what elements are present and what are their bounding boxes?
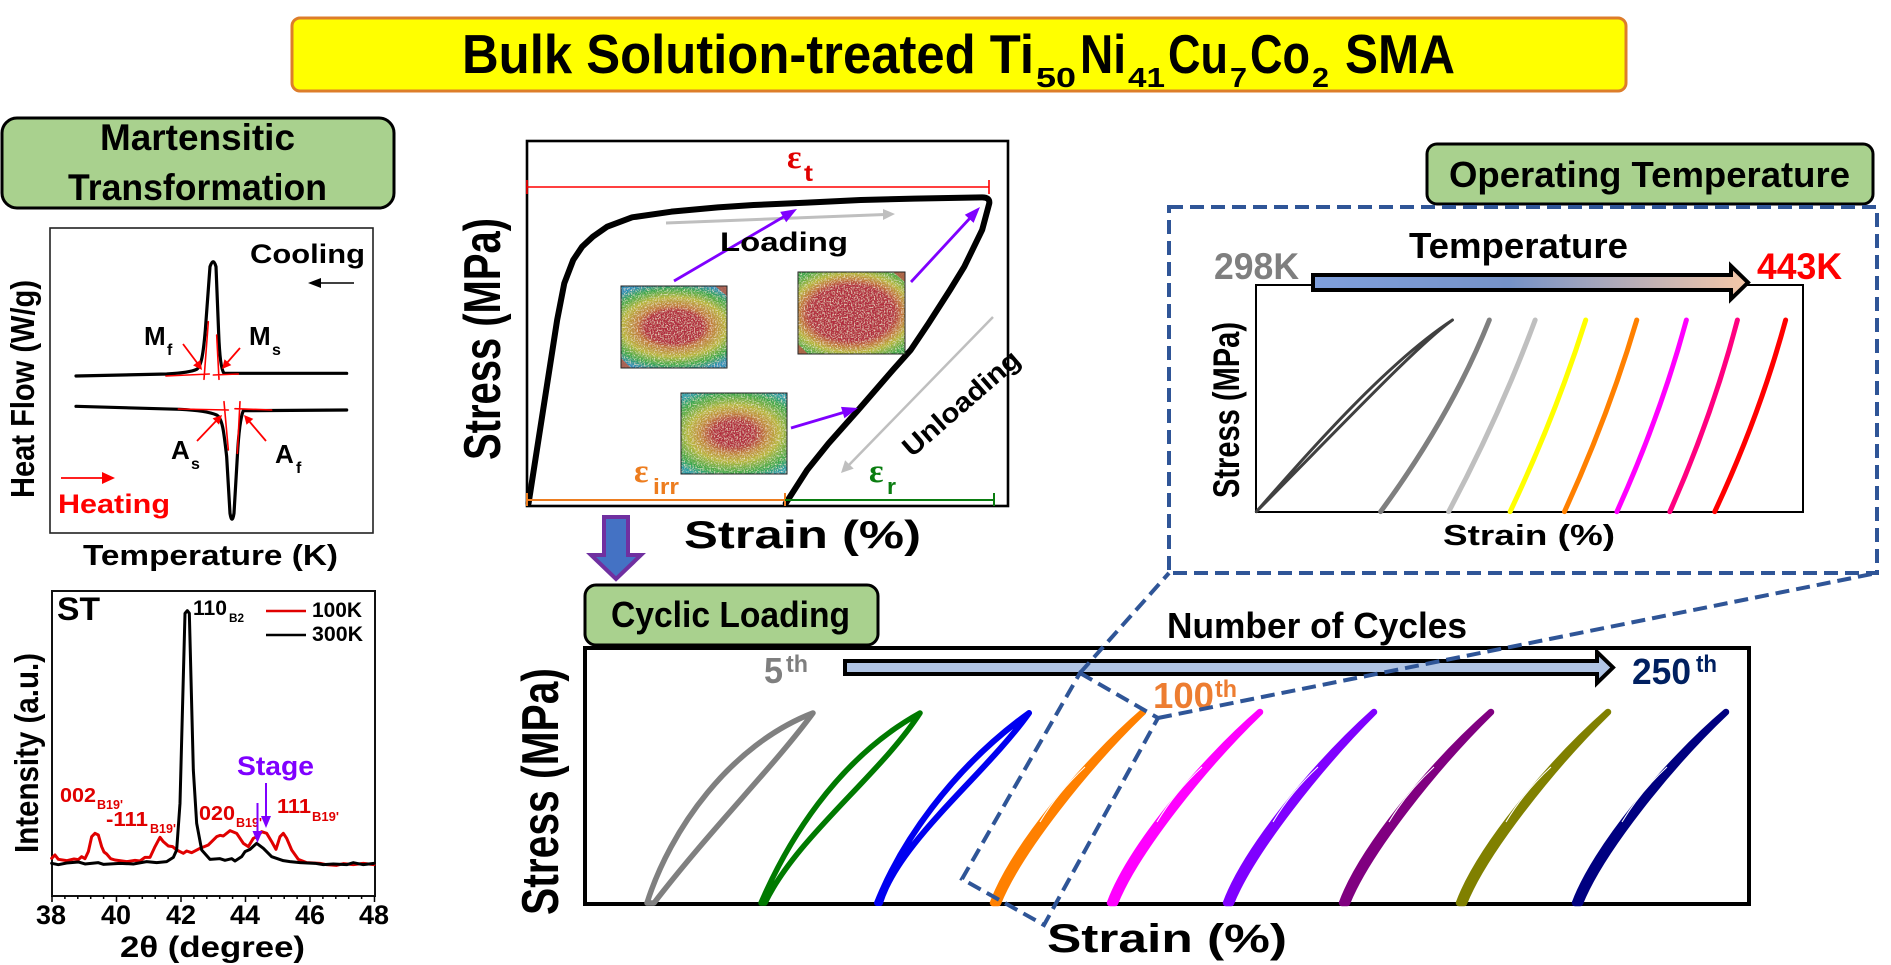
peak labels: B19'	[150, 821, 176, 836]
label: 5th: th	[786, 651, 808, 678]
curve: 100K trace	[52, 831, 374, 865]
peak labels: B19'	[97, 797, 123, 812]
title banner: Co	[1250, 23, 1310, 85]
x tick labels: XRD: 44	[230, 900, 260, 930]
dimension: total strain	[527, 180, 989, 194]
x tick labels: XRD: 42	[166, 900, 196, 930]
heading: Operating Temperature	[1427, 144, 1873, 204]
loop: purple	[1342, 712, 1491, 903]
peak labels: 111	[277, 796, 311, 818]
label: 100th: th	[1215, 676, 1237, 703]
chart: operating temperature curves	[1206, 225, 1842, 552]
heading: Cyclic Loading	[585, 585, 878, 645]
peak labels: -111	[106, 809, 148, 831]
legend: 100K	[312, 599, 362, 622]
label: 250th: 250	[1632, 651, 1691, 692]
loop: 250th cycle navy	[1575, 712, 1726, 903]
title banner: 41	[1128, 62, 1165, 93]
x tick labels: XRD: 40	[101, 900, 131, 930]
title banner: Bulk Solution-treated Ti	[462, 23, 1034, 85]
chart: cyclic loading curves	[585, 648, 1749, 904]
dimension: irreversible strain	[527, 493, 785, 506]
label: Ms	[249, 321, 281, 359]
chart: DSC heat flow	[50, 228, 373, 533]
label: epsilon r	[869, 453, 896, 499]
label: 250th: th	[1696, 651, 1717, 678]
axis label: main strain: Strain (%)	[684, 514, 921, 557]
arrow: heating direction	[61, 472, 115, 484]
arrow: pointer to image 1	[674, 209, 797, 281]
loop: 100th cycle orange	[993, 712, 1143, 903]
heading: Cyclic Loading: Cyclic Loading	[611, 594, 850, 635]
label: epsilon t: ε	[787, 139, 802, 176]
peak labels: 020	[199, 803, 235, 825]
curve: 300K trace	[52, 611, 374, 865]
label: Ms: M	[249, 321, 271, 351]
label: epsilon t	[787, 139, 813, 186]
dimension: recoverable strain	[785, 493, 994, 506]
x tick labels: XRD	[36, 900, 389, 930]
label: Temperature: Temperature	[1409, 225, 1628, 266]
label: Af	[275, 439, 302, 477]
label: epsilon r: r	[887, 474, 896, 499]
label: Mf	[144, 321, 173, 359]
axis label: Intensity: Intensity (a.u.)	[8, 653, 45, 853]
title banner: 50	[1036, 62, 1076, 93]
text: Unloading: Unloading	[896, 344, 1026, 463]
label: 298K: 298K	[1214, 246, 1299, 287]
x tick labels: XRD: 38	[36, 900, 66, 930]
curves by temperature	[1256, 320, 1786, 512]
label: 100th: 100	[1153, 675, 1214, 716]
arrow: cooling direction	[308, 278, 354, 288]
loop: violet	[1226, 712, 1374, 903]
legend	[266, 599, 363, 646]
label: 443K: 443K	[1757, 246, 1842, 287]
label: 110 B2	[193, 597, 244, 625]
arrow: Ms	[222, 348, 240, 369]
axis label: cyclic stress: Stress (MPa)	[512, 668, 570, 915]
text: Cooling label: Cooling	[250, 239, 365, 269]
axis label: 2 theta: 2θ (degree)	[120, 931, 305, 964]
loop: green	[761, 713, 920, 903]
arrow: Mf	[183, 344, 202, 370]
label: Number of Cycles: Number of Cycles	[1167, 605, 1467, 646]
axis label: Heat Flow (W/g): Heat Flow (W/g)	[4, 280, 41, 498]
title banner: 7	[1230, 62, 1247, 93]
loop: blue	[877, 713, 1029, 903]
arrow: unloading direction	[841, 317, 993, 473]
curve: stress-strain loop	[529, 197, 989, 503]
label: Ms: s	[272, 342, 281, 359]
title banner: Ni	[1080, 23, 1126, 85]
axis label: cyclic strain: Strain (%)	[1047, 917, 1287, 961]
label: Mf: M	[144, 321, 166, 351]
loop: magenta	[1110, 712, 1260, 903]
strain map image 3	[681, 393, 787, 474]
title banner: SMA	[1345, 23, 1455, 85]
arrow: pointer to image 2	[911, 207, 980, 282]
text: Loading: Loading	[720, 227, 848, 257]
arrow: down to cyclic loading	[591, 517, 641, 579]
title banner: Cu	[1168, 23, 1228, 85]
axis label: main stress: Stress (MPa)	[454, 218, 512, 460]
heading: Martensitic Transformation: Transformation	[68, 167, 327, 208]
axis label: strain inset: Strain (%)	[1443, 520, 1615, 552]
arrow: Af	[244, 415, 266, 441]
label: epsilon irr	[634, 453, 679, 499]
strain map image 2	[798, 272, 905, 354]
arrow: temperature gradient	[1313, 266, 1748, 299]
arrow: number of cycles	[845, 652, 1613, 683]
heading: Martensitic Transformation	[2, 117, 394, 208]
text: Heating label: Heating	[58, 489, 170, 519]
label: 5th	[764, 650, 808, 691]
chart: main stress-strain	[527, 139, 1026, 506]
label: epsilon irr: ε	[634, 453, 649, 490]
strain map image 1	[621, 286, 727, 368]
label: Af: A	[275, 439, 294, 469]
label: As: s	[191, 456, 200, 473]
x tick labels: XRD: 46	[295, 900, 325, 930]
label: Stage: Stage	[237, 751, 314, 781]
label: epsilon r: ε	[869, 453, 884, 490]
heading: Operating Temperature: Operating Temperature	[1449, 154, 1850, 195]
legend: 300K	[312, 623, 363, 646]
label: Af: f	[296, 460, 302, 477]
arrow: loading direction	[666, 209, 895, 223]
label: ST: ST	[57, 591, 100, 627]
title banner: 2	[1312, 62, 1329, 93]
x tick labels: XRD: 48	[359, 900, 389, 930]
arrows: stage markers	[252, 783, 271, 843]
arrow: pointer to image 3	[791, 407, 858, 428]
label: 110 B2: 110	[193, 597, 227, 620]
axis label: Temperature (K): Temperature (K)	[83, 540, 338, 572]
label: epsilon irr: irr	[653, 474, 679, 499]
arrow: As	[197, 415, 222, 441]
chart: XRD intensity	[52, 591, 375, 902]
peak labels: 002	[60, 785, 96, 807]
axis label: stress inset: Stress (MPa)	[1206, 322, 1247, 498]
loop: olive	[1459, 712, 1608, 903]
peak labels: B19'	[236, 815, 262, 830]
loop: 5th cycle	[647, 713, 813, 903]
title banner	[292, 18, 1626, 93]
curve: cooling and heating traces	[76, 262, 347, 519]
label: epsilon t: t	[804, 160, 813, 186]
label: Mf: f	[167, 342, 173, 359]
label: As	[171, 435, 200, 473]
peak labels: B19'	[312, 809, 339, 824]
label: 5th: 5	[764, 650, 783, 691]
heading: Martensitic Transformation: Martensitic	[100, 117, 295, 158]
label: 110 B2: B2	[229, 611, 244, 625]
peak labels	[60, 785, 339, 836]
label: As: A	[171, 435, 190, 465]
zoom callout: dashed connectors	[962, 207, 1877, 925]
